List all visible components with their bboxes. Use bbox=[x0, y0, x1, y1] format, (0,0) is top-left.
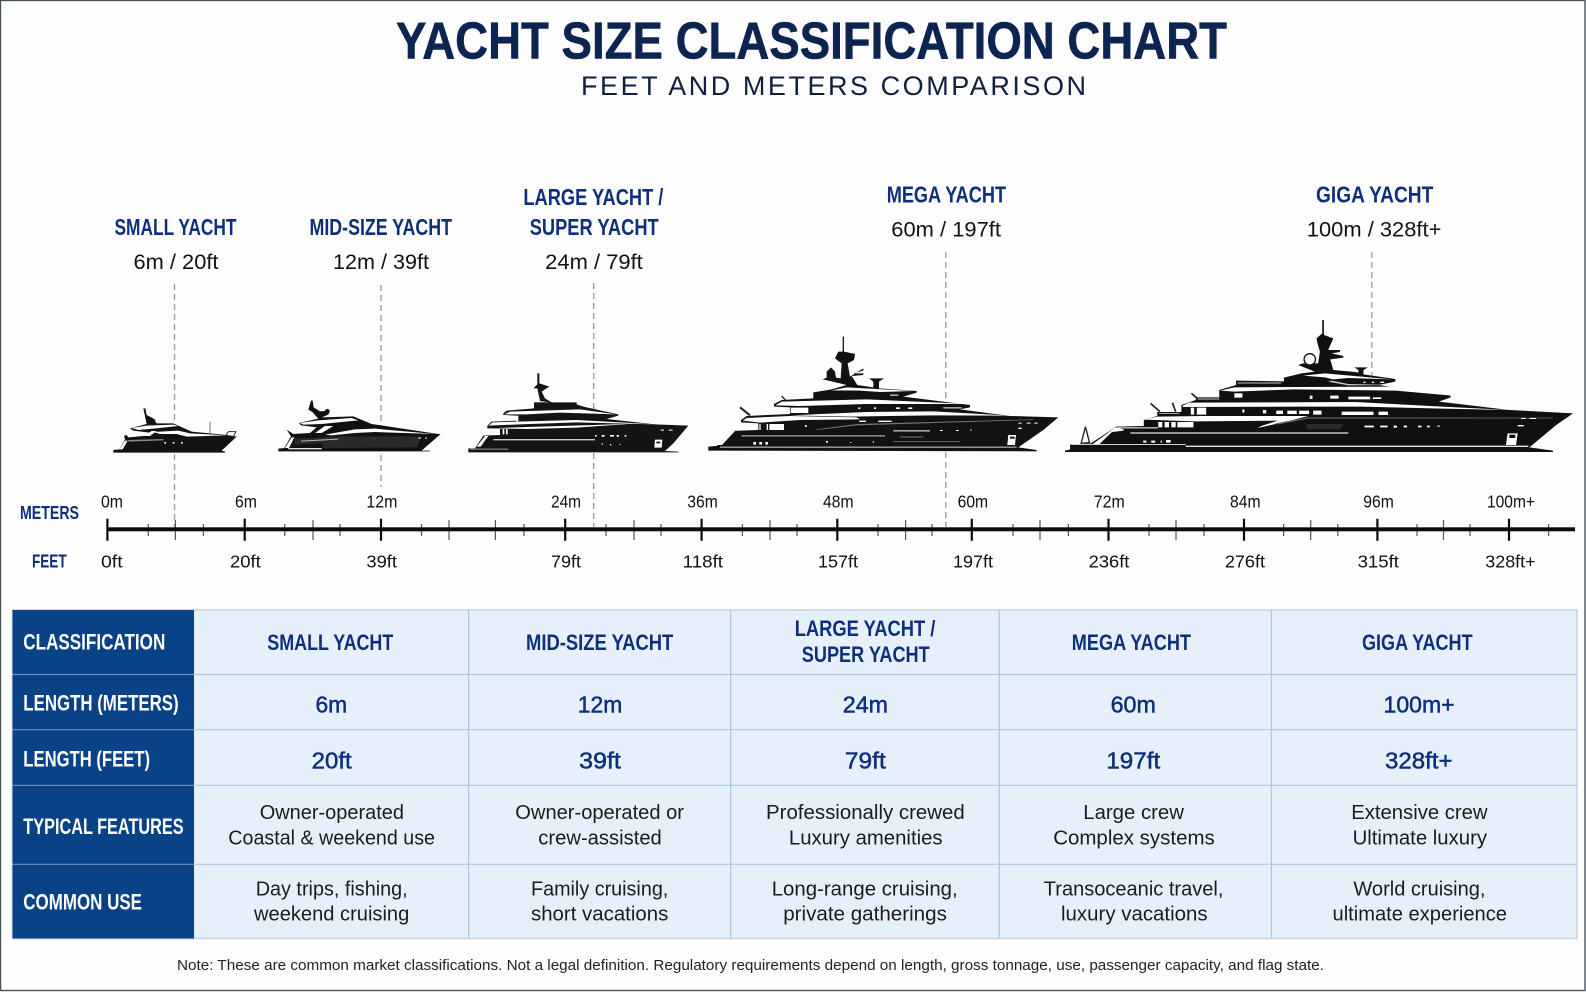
column: large / super yacht: private gatherings bbox=[783, 903, 947, 926]
column: mid-size yacht: Owner-operated or bbox=[515, 801, 684, 824]
feet tick labels: 197ft bbox=[953, 552, 993, 572]
column: mid-size yacht bbox=[515, 630, 684, 926]
feet tick labels: 39ft bbox=[366, 552, 397, 572]
footnote: Note: These are common market classifications. Not a legal definition. Regulatory requirements depend on length, gross tonnage, use, passenger capacity, and flag state. bbox=[177, 957, 1324, 974]
column: giga yacht: 100m+ bbox=[1384, 692, 1455, 718]
column: mega yacht: 197ft bbox=[1106, 747, 1161, 773]
feet tick labels: 20ft bbox=[230, 552, 261, 572]
feet tick labels: 315ft bbox=[1358, 552, 1399, 572]
column: mid-size yacht: 12m bbox=[578, 692, 622, 718]
column: giga yacht: 328ft+ bbox=[1385, 747, 1452, 773]
column: giga yacht: GIGA YACHT bbox=[1362, 630, 1473, 655]
column: giga yacht: World cruising, bbox=[1353, 878, 1486, 901]
column: small yacht: Owner-operated bbox=[260, 801, 404, 824]
feet tick labels: 276ft bbox=[1225, 552, 1265, 572]
column: large / super yacht: Professionally crewed bbox=[766, 801, 965, 824]
column: large / super yacht: Luxury amenities bbox=[789, 826, 943, 849]
column: small yacht: 6m bbox=[316, 692, 347, 718]
meters axis label: METERS bbox=[20, 503, 79, 523]
column: giga yacht: ultimate experience bbox=[1332, 903, 1507, 926]
meter tick labels: 84m bbox=[1230, 492, 1260, 512]
column: mid-size yacht: Family cruising, bbox=[531, 878, 668, 901]
category label: large / super yacht: LARGE YACHT / bbox=[523, 184, 664, 210]
feet axis label: FEET bbox=[32, 552, 67, 572]
column: large / super yacht: LARGE YACHT / bbox=[795, 616, 935, 641]
row header column bbox=[12, 610, 194, 938]
category label: mega yacht: MEGA YACHT bbox=[887, 181, 1006, 207]
column: mega yacht: 60m bbox=[1111, 692, 1156, 718]
feet tick labels: 0ft bbox=[101, 552, 123, 572]
subtitle: FEET AND METERS COMPARISON bbox=[581, 71, 1086, 101]
meter tick labels: 48m bbox=[823, 492, 854, 512]
yacht: mega bbox=[708, 337, 1058, 451]
category label: small yacht: 6m / 20ft bbox=[134, 250, 219, 274]
column: mega yacht: Complex systems bbox=[1053, 826, 1215, 849]
meter tick labels: 60m bbox=[958, 492, 988, 512]
comparison table bbox=[12, 610, 1577, 938]
column: large / super yacht: 24m bbox=[843, 692, 888, 718]
category label: giga yacht: 100m / 328ft+ bbox=[1307, 218, 1441, 242]
column: mega yacht: Transoceanic travel, bbox=[1044, 878, 1223, 901]
category label: mid-size yacht bbox=[310, 214, 452, 274]
meter tick labels: 100m+ bbox=[1487, 492, 1535, 512]
meter tick labels: 36m bbox=[687, 492, 718, 512]
column: large / super yacht bbox=[766, 616, 965, 926]
feet tick labels: 79ft bbox=[551, 552, 581, 572]
row header column: TYPICAL FEATURES bbox=[23, 814, 184, 839]
feet tick labels bbox=[101, 552, 1536, 572]
category label: large / super yacht bbox=[523, 184, 664, 274]
meter tick labels: 6m bbox=[235, 492, 257, 512]
column: giga yacht bbox=[1332, 630, 1507, 926]
category label: giga yacht: GIGA YACHT bbox=[1316, 181, 1433, 207]
category label: small yacht: SMALL YACHT bbox=[114, 214, 236, 240]
yacht: small bbox=[113, 408, 237, 453]
row header column: CLASSIFICATION bbox=[23, 629, 165, 654]
column: large / super yacht: Long-range cruising, bbox=[772, 878, 958, 901]
category label: mega yacht: 60m / 197ft bbox=[891, 218, 1001, 242]
scale ruler bbox=[107, 519, 1575, 541]
column: small yacht: weekend cruising bbox=[253, 903, 409, 926]
column: small yacht: Day trips, fishing, bbox=[256, 878, 408, 901]
column: mega yacht: MEGA YACHT bbox=[1072, 630, 1191, 655]
column: mid-size yacht: 39ft bbox=[579, 747, 621, 773]
meter tick labels: 96m bbox=[1363, 492, 1394, 512]
title: YACHT SIZE CLASSIFICATION CHART bbox=[396, 12, 1227, 70]
category label: large / super yacht: 24m / 79ft bbox=[545, 250, 643, 274]
column: small yacht: 20ft bbox=[312, 747, 352, 773]
column: mega yacht: luxury vacations bbox=[1061, 903, 1208, 926]
feet tick labels: 157ft bbox=[818, 552, 858, 572]
row header column: LENGTH (FEET) bbox=[23, 747, 150, 772]
column: small yacht bbox=[228, 630, 435, 926]
meter tick labels: 0m bbox=[101, 492, 123, 512]
meter tick labels: 72m bbox=[1094, 492, 1125, 512]
yacht: mid-size bbox=[278, 401, 441, 451]
meter tick labels: 12m bbox=[366, 492, 397, 512]
column: mid-size yacht: short vacations bbox=[531, 903, 668, 926]
column: large / super yacht: 79ft bbox=[845, 747, 886, 773]
meter tick labels: 24m bbox=[551, 492, 581, 512]
yacht: giga bbox=[1065, 320, 1573, 452]
column: mega yacht: Large crew bbox=[1083, 801, 1184, 824]
category label: mid-size yacht: MID-SIZE YACHT bbox=[310, 214, 452, 240]
column: giga yacht: Extensive crew bbox=[1351, 801, 1488, 824]
feet tick labels: 236ft bbox=[1089, 552, 1130, 572]
category label: giga yacht bbox=[1307, 181, 1441, 242]
column: mega yacht bbox=[1044, 630, 1223, 926]
column: mid-size yacht: crew-assisted bbox=[538, 826, 662, 849]
meter tick labels bbox=[101, 492, 1535, 512]
category label: small yacht bbox=[114, 214, 236, 274]
column: giga yacht: Ultimate luxury bbox=[1353, 826, 1488, 849]
feet tick labels: 328ft+ bbox=[1485, 552, 1536, 572]
feet tick labels: 118ft bbox=[683, 552, 723, 572]
column: large / super yacht: SUPER YACHT bbox=[802, 642, 930, 667]
yacht: large / super bbox=[468, 373, 688, 452]
category label: mega yacht bbox=[887, 181, 1006, 242]
category label: large / super yacht: SUPER YACHT bbox=[530, 214, 659, 240]
column: mid-size yacht: MID-SIZE YACHT bbox=[526, 630, 674, 655]
column: small yacht: SMALL YACHT bbox=[267, 630, 394, 655]
category label: mid-size yacht: 12m / 39ft bbox=[333, 250, 429, 274]
row header column: LENGTH (METERS) bbox=[23, 691, 179, 716]
column: small yacht: Coastal & weekend use bbox=[228, 826, 435, 849]
row header column: COMMON USE bbox=[23, 889, 142, 914]
